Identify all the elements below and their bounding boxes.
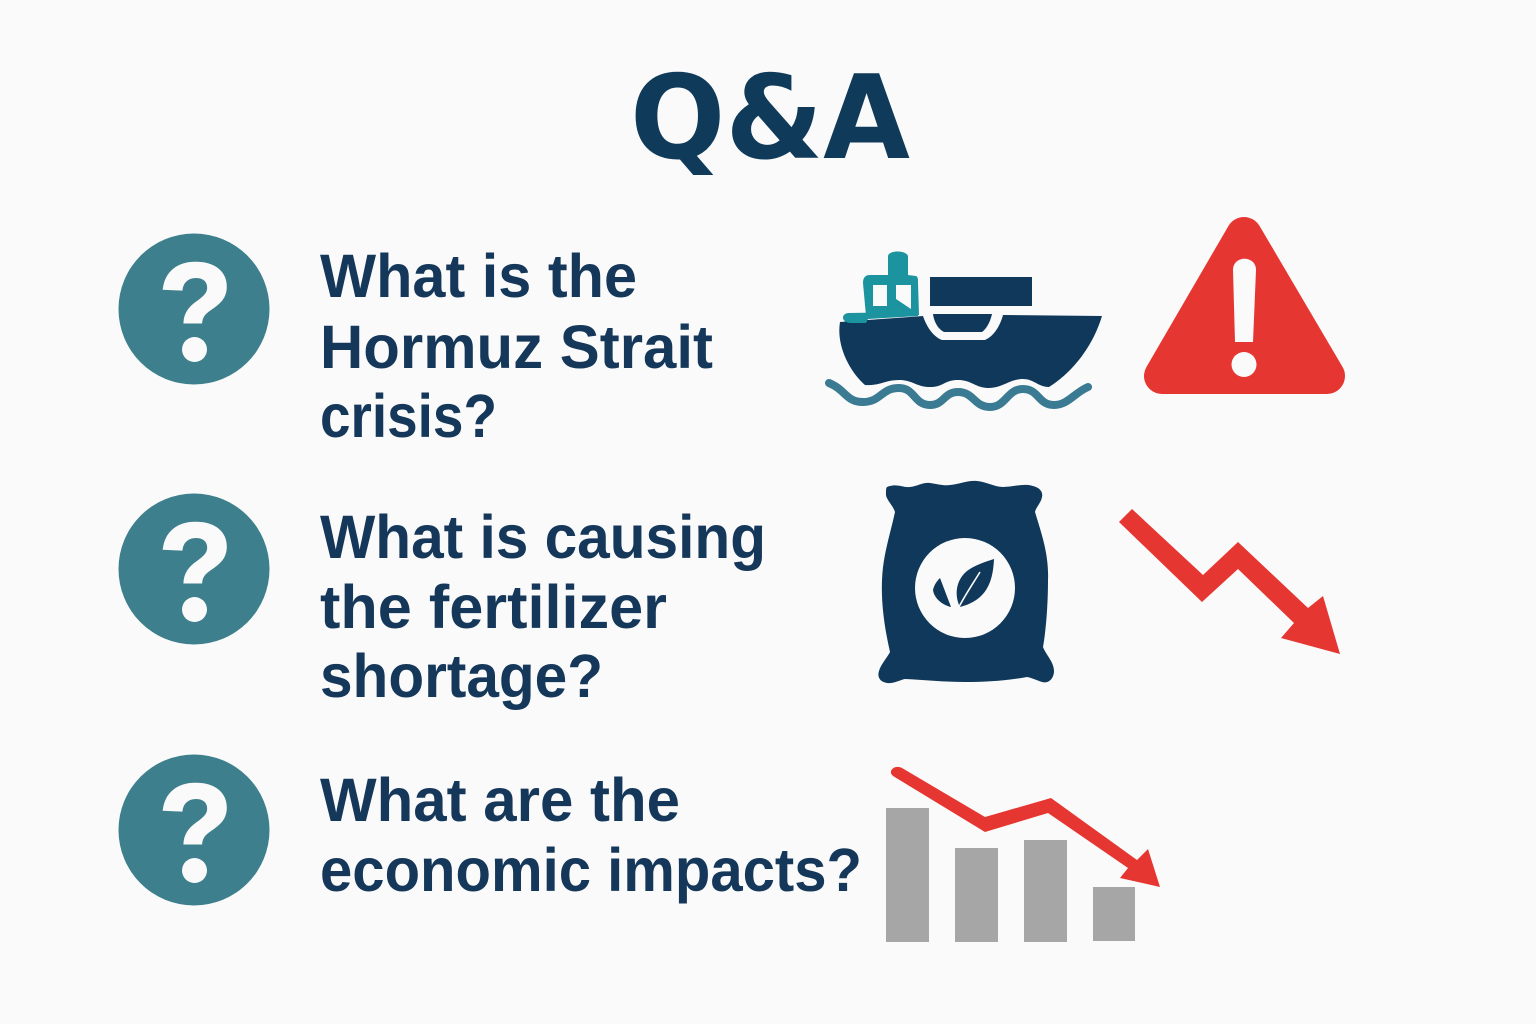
icon: question mark badge 3 — [118, 754, 270, 906]
text: question 2: the fertilizer — [320, 573, 667, 641]
bars — [886, 808, 1135, 942]
icon: question mark badge 1 — [118, 234, 270, 384]
icon: warning triangle — [1162, 235, 1327, 377]
panel: question 2 — [118, 481, 1340, 710]
icon: cargo ship on waves — [829, 252, 1102, 407]
icon: question mark badge 1: ? — [159, 239, 232, 373]
icon: question mark badge 3: ? — [159, 760, 232, 894]
text: question 1: Hormuz Strait — [320, 313, 713, 381]
text: question 2: What is causing — [320, 503, 766, 571]
panel: question 3 — [118, 754, 1160, 942]
icon: fertilizer sack — [878, 481, 1054, 683]
text: question 1: crisis? — [320, 382, 497, 450]
icon: leaf emblem — [915, 538, 1015, 638]
panel: question 1 — [118, 234, 1327, 450]
arrow: red downward trend — [891, 767, 1160, 887]
text: question 2: shortage? — [320, 642, 603, 710]
text: question 3: What are the — [320, 766, 680, 834]
text: question 3: economic impacts? — [320, 836, 862, 904]
icon: question mark badge 2 — [118, 494, 270, 644]
text: question 1: What is the — [320, 242, 637, 310]
arrow: zigzag downward trend — [1119, 509, 1340, 654]
title: Q&A — [630, 51, 910, 186]
icon: question mark badge 2: ? — [159, 499, 232, 633]
chart: declining bars with arrow — [886, 767, 1160, 942]
